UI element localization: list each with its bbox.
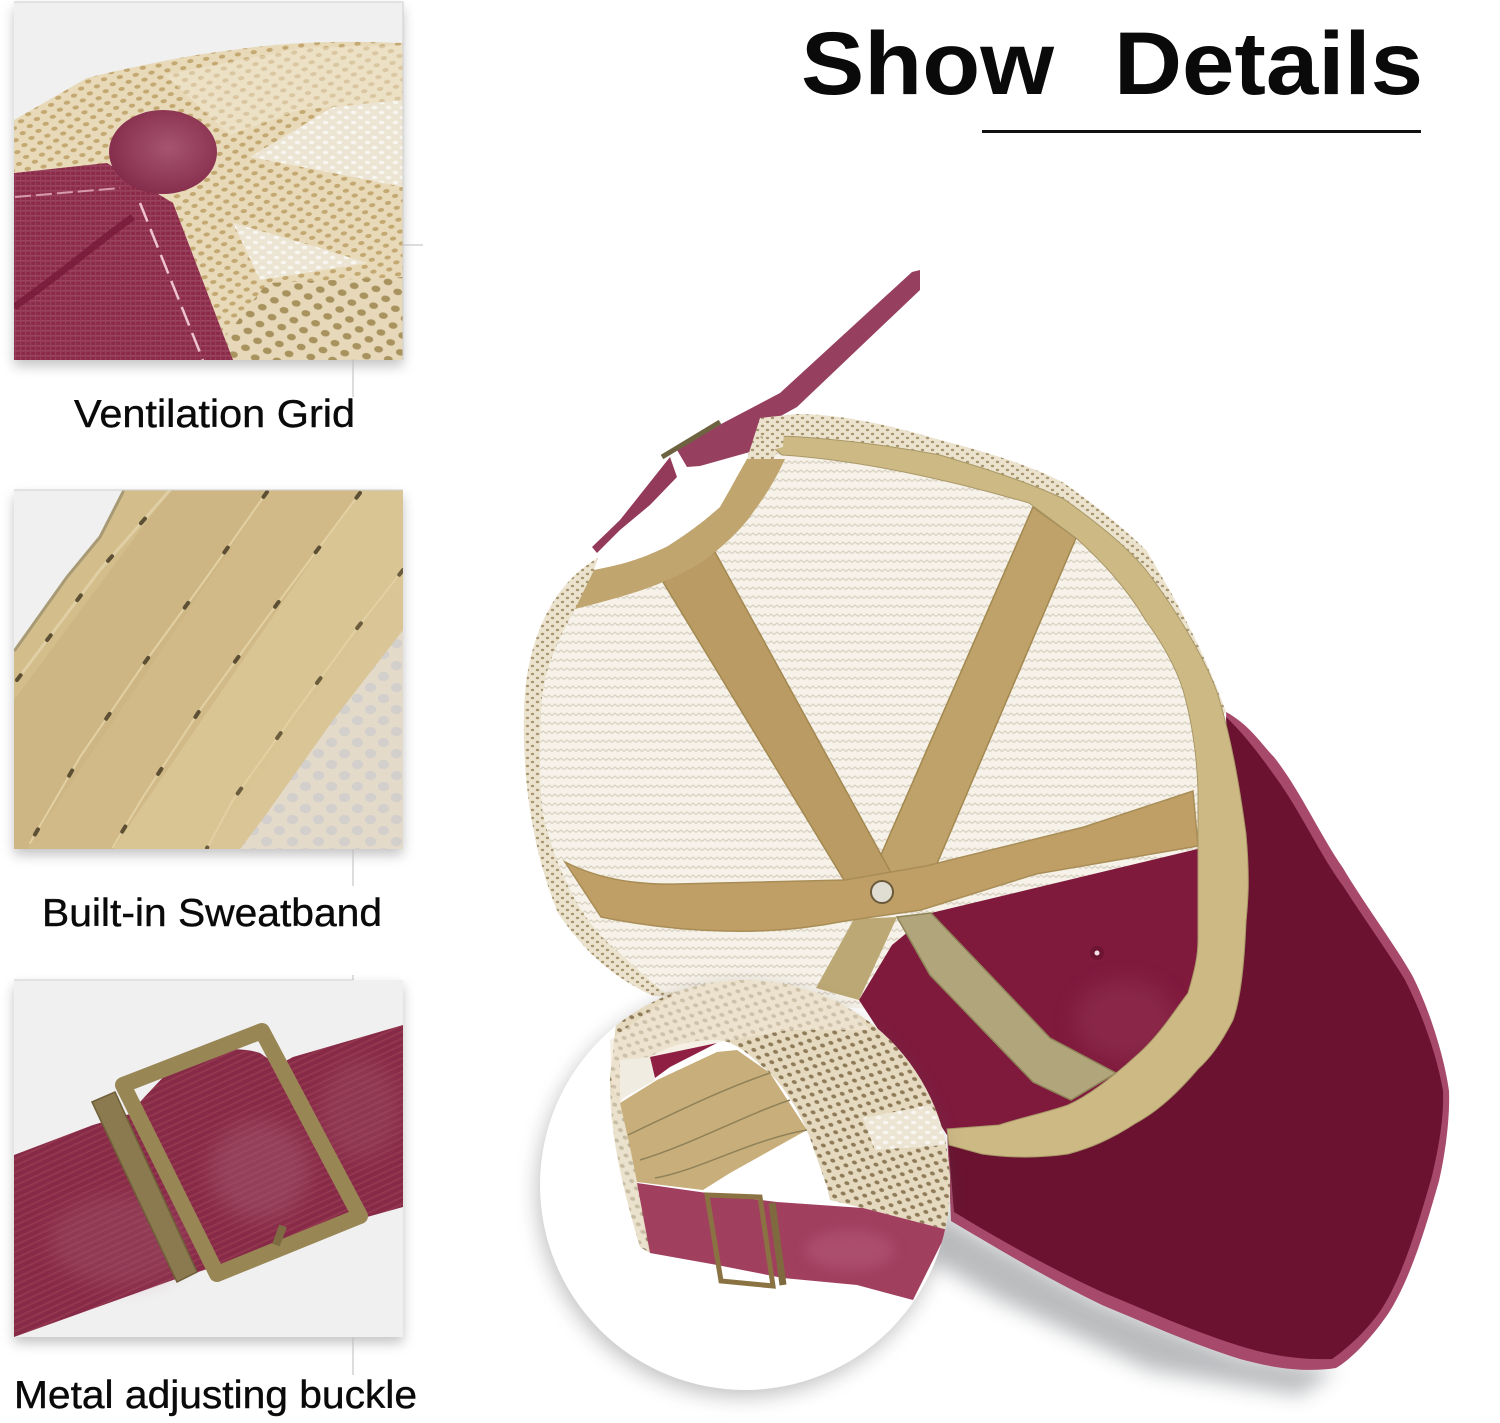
inset sweatband bbox=[620, 1050, 807, 1190]
cap visor bbox=[947, 712, 1449, 1370]
illustration: baseball cap underside bbox=[524, 270, 1449, 1395]
title: Show Details: Show bbox=[801, 13, 1055, 113]
panel: built-in sweatband detail bbox=[14, 490, 403, 886]
strap bbox=[14, 1025, 403, 1337]
inset buckle bbox=[707, 1195, 783, 1286]
panel: ventilation grid detail bbox=[14, 2, 423, 397]
cap center eyelet bbox=[871, 881, 893, 903]
cap sweatband: rear opening bbox=[575, 459, 785, 609]
label: Metal adjusting buckle: Metal adjusting buckle bbox=[14, 1374, 417, 1417]
inset mesh arch bbox=[610, 960, 960, 1253]
cap outer mesh rim bbox=[524, 414, 1226, 1010]
cap inner fine mesh bbox=[540, 445, 1205, 1010]
icon: cap top button bbox=[109, 110, 217, 194]
icon: metal buckle bbox=[92, 1031, 360, 1282]
cap crown vent eyelet bbox=[1090, 946, 1104, 960]
cap seam tape: horizontal bbox=[565, 791, 1198, 931]
cap sweatband: right and front bbox=[761, 436, 1248, 1157]
cap seam tape: upper right bbox=[870, 507, 1076, 880]
panel: metal adjusting buckle detail bbox=[14, 975, 403, 1375]
cap back strap with small buckle bbox=[592, 270, 920, 553]
cap seam tape: bottom left bbox=[816, 917, 897, 1000]
cap mesh corner bbox=[760, 417, 785, 452]
label: Ventilation Grid: Ventilation Grid bbox=[74, 393, 355, 436]
title: Show Details bbox=[801, 13, 1423, 133]
cap seam tape: bottom right bbox=[897, 913, 1116, 1100]
title: Show Details: Details bbox=[1114, 13, 1423, 113]
inset circle: cap back closure bbox=[537, 960, 960, 1397]
cap seam tape: upper left bbox=[663, 552, 895, 890]
inset strap bbox=[637, 1183, 948, 1300]
label: Built-in Sweatband: Built-in Sweatband bbox=[42, 892, 382, 935]
cap crown fabric panel bbox=[859, 846, 1215, 1135]
cap visor shadow bbox=[930, 1215, 1336, 1395]
